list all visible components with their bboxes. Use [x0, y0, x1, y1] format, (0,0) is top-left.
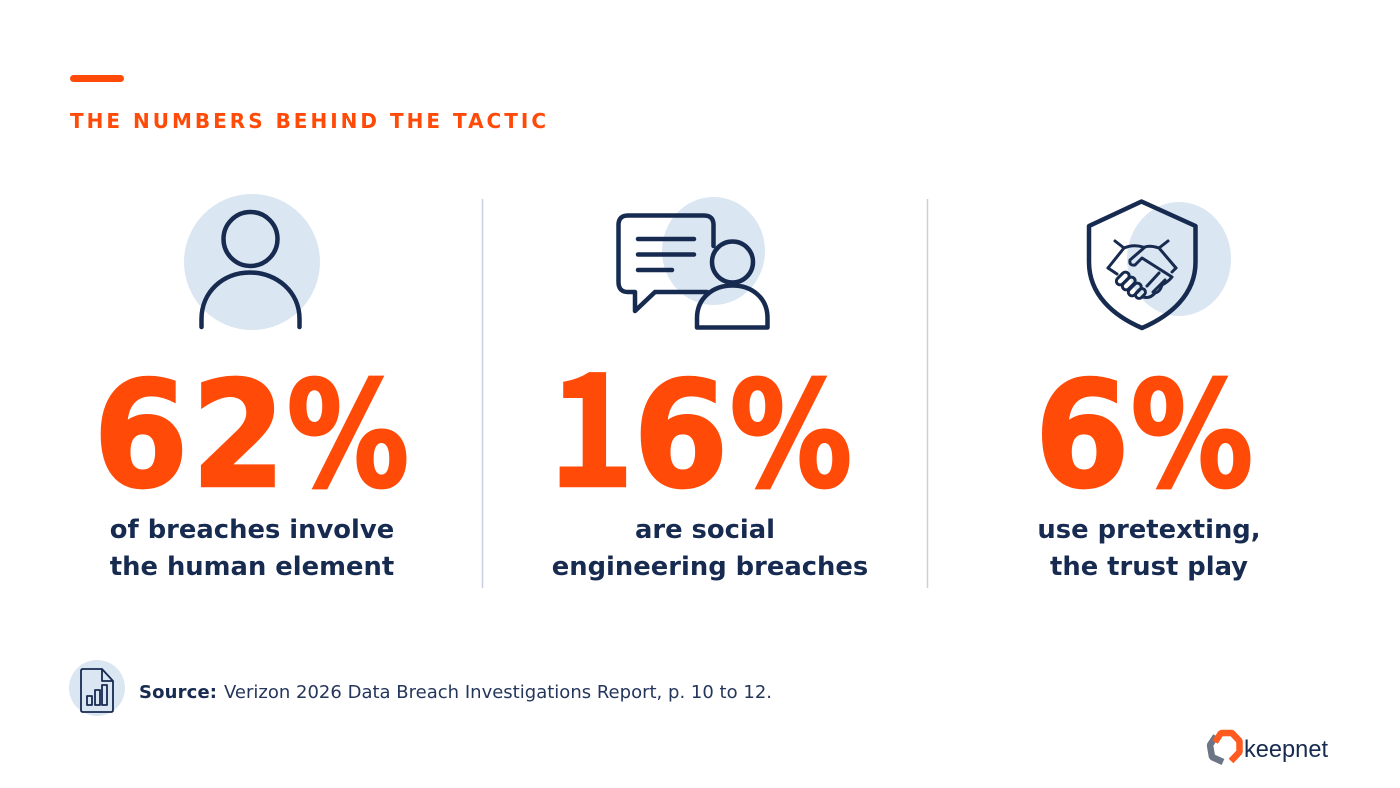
label: social engineering: engineering breaches	[552, 552, 868, 582]
stat: 16%: %	[730, 350, 852, 521]
source icon: document chart	[69, 660, 125, 716]
logo: keepnet: keepnet	[1244, 736, 1328, 763]
icon: shield handshake	[1089, 202, 1231, 328]
label: human element: the human element	[110, 552, 394, 582]
stat: 62%: 2	[191, 350, 285, 521]
logo: keepnet	[1210, 733, 1328, 763]
stat: 6%: %	[1131, 350, 1253, 521]
label: pretexting: use pretexting,	[1037, 515, 1261, 545]
icon: chat bubble and person	[618, 197, 768, 328]
panel: pretexting	[1035, 202, 1261, 582]
panel: social engineering	[549, 197, 868, 582]
label: human element: of breaches involve	[110, 515, 394, 545]
label: social engineering: are social	[635, 515, 775, 545]
source text: Source:	[139, 682, 217, 703]
stat: 6%: 6	[1035, 350, 1130, 521]
label: pretexting: the trust play	[1050, 552, 1248, 582]
accent bar	[70, 75, 124, 82]
source text: Verizon 2026 Data Breach Investigations Report, p. 10 to 12.	[224, 682, 772, 703]
stat: 16%: 6	[633, 350, 728, 521]
stat: 62%: 6	[93, 350, 188, 521]
stat: 16%: 1	[549, 310, 634, 530]
icon: person	[184, 194, 320, 330]
stat: 62%: %	[287, 350, 409, 521]
title: THE NUMBERS BEHIND THE TACTIC	[70, 109, 546, 133]
panel: human element	[93, 194, 409, 582]
